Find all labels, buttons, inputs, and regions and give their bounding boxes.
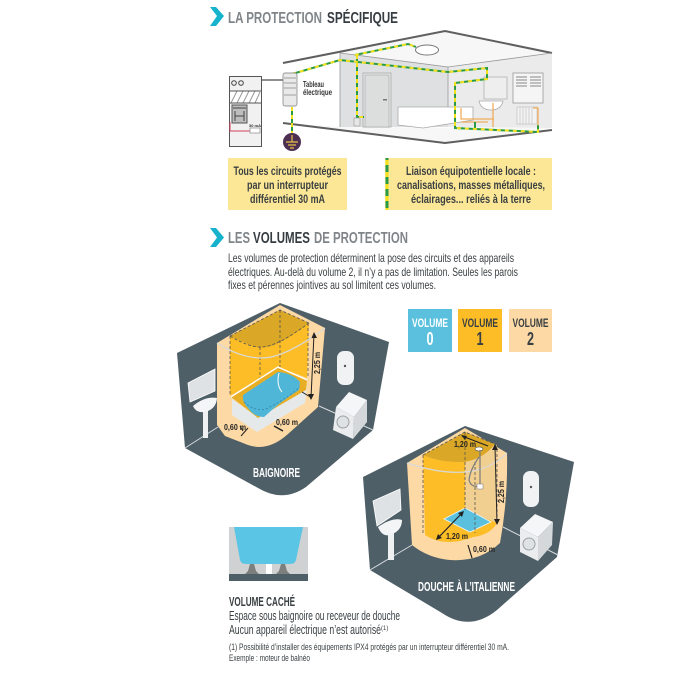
text: footnote: (1) Possibilité d’installer des équipements IPX4 protégés par un interrupteur différentiel 30 mA. bbox=[229, 642, 509, 652]
label: baignoire: BAIGNOIRE bbox=[253, 465, 300, 480]
dimension: 0,60 m bbox=[468, 545, 495, 558]
radiator bbox=[517, 107, 537, 124]
bathtub bbox=[398, 107, 473, 128]
callout: liaison équipotentielle: canalisations, masses métalliques, bbox=[397, 178, 545, 192]
volume 2 ceiling line bbox=[217, 328, 325, 358]
height dimension: 2,25 m bbox=[313, 352, 322, 374]
dimension: height 2,25 m bbox=[492, 444, 506, 525]
door bbox=[363, 73, 391, 127]
heading: les volumes de protection bbox=[228, 230, 408, 247]
icon: earth ground bbox=[283, 133, 301, 151]
text: introduction: Les volumes de protection déterminent la pose des circuits et des appareils bbox=[228, 251, 514, 265]
legend: volume 1: VOLUME bbox=[462, 316, 498, 330]
dashed outlines bbox=[423, 432, 497, 535]
width dimensions bbox=[224, 418, 298, 436]
diagram: house cutaway bbox=[283, 31, 552, 143]
cylinder ring bbox=[407, 453, 507, 472]
dimension: 0,60 m: 0,60 m bbox=[473, 545, 495, 554]
hanging dashes bbox=[230, 310, 309, 416]
volume 1 ceiling bbox=[423, 432, 495, 462]
heading: la protection spécifique bbox=[228, 8, 398, 27]
heading: la protection spécifique: LA PROTECTION bbox=[228, 10, 322, 27]
callout: circuits protégés: différentiel 30 mA bbox=[250, 192, 325, 206]
text: volume caché: VOLUME CACHÉ bbox=[229, 594, 295, 609]
diagram: switchboard detail bbox=[230, 76, 262, 146]
width dimensions: 0,60 m bbox=[224, 423, 246, 432]
icon: section chevron 2 bbox=[210, 228, 224, 247]
pipes bbox=[461, 103, 538, 127]
dimension: floor 1,20 m bbox=[436, 511, 468, 541]
washing machine bbox=[333, 392, 367, 439]
washbasin bbox=[193, 398, 217, 438]
text: introduction bbox=[228, 251, 518, 292]
floor edges bbox=[185, 406, 373, 448]
equipotential wires bbox=[292, 44, 538, 136]
heading: les volumes de protection: LES bbox=[228, 230, 250, 247]
legend: volume 2: 2 bbox=[527, 329, 534, 349]
water heater bbox=[337, 351, 354, 385]
volume 1 left wall bbox=[423, 455, 465, 535]
text: footnote: Exemple : moteur de balnéo bbox=[229, 653, 310, 663]
icon: electrical panel bbox=[283, 73, 297, 106]
floor edges bbox=[370, 527, 558, 570]
label: douche à l'italienne: DOUCHE À L’ITALIENNE bbox=[418, 579, 515, 594]
callout: circuits protégés: Tous les circuits protégés bbox=[234, 164, 342, 178]
diagram: volume caché bbox=[229, 527, 308, 581]
heading: la protection spécifique: SPÉCIFIQUE bbox=[327, 8, 398, 27]
heading: les volumes de protection: DE PROTECTION bbox=[314, 230, 408, 247]
legend: volume 0: VOLUME bbox=[412, 316, 448, 330]
dimension: top 1,20 m: 1,20 m bbox=[454, 440, 476, 449]
room shell bbox=[363, 426, 574, 622]
window bbox=[513, 73, 543, 103]
heading: les volumes de protection: VOLUMES bbox=[253, 230, 310, 247]
sink bbox=[479, 101, 503, 110]
legend: volume 1 bbox=[458, 309, 502, 352]
dimension: height 2,25 m: 2,25 m bbox=[497, 481, 506, 503]
callout: liaison équipotentielle bbox=[385, 158, 552, 210]
callout: liaison équipotentielle: Liaison équipotentielle locale : bbox=[406, 164, 536, 178]
mirror bbox=[484, 77, 507, 99]
text: footnote bbox=[229, 642, 509, 663]
washing machine bbox=[520, 514, 553, 561]
legend: volume 2 bbox=[509, 309, 552, 352]
volume 2 cylinder bbox=[407, 428, 507, 560]
callout: circuits protégés: par un interrupteur bbox=[247, 178, 328, 192]
text: volume caché: (1) bbox=[381, 626, 388, 632]
text: introduction: fixes et pérennes jointives au sol limitent ces volumes. bbox=[228, 278, 436, 292]
arrow: detail to panel bbox=[262, 76, 290, 85]
water heater bbox=[523, 471, 539, 507]
icon: section chevron 1 bbox=[210, 7, 224, 26]
diagram: baignoire room bbox=[177, 303, 389, 495]
volume 1 walls bbox=[230, 310, 309, 396]
room shell bbox=[177, 303, 389, 495]
label: tableau électrique: Tableau bbox=[303, 80, 324, 89]
legend: volume 1: 1 bbox=[476, 329, 484, 349]
bath deck bbox=[231, 368, 307, 418]
shower set bbox=[469, 447, 483, 489]
diagram: switchboard detail: 30 mA bbox=[249, 123, 261, 128]
dimension: floor 1,20 m: 1,20 m bbox=[446, 532, 468, 541]
volume 2 bbox=[217, 305, 325, 447]
text: volume caché: Aucun appareil électrique n’est autorisé bbox=[229, 623, 381, 637]
dimension: top 1,20 m bbox=[454, 435, 488, 449]
volume 1 right wall bbox=[465, 444, 497, 523]
shower tray bbox=[444, 508, 491, 532]
legend: volume 0: 0 bbox=[426, 329, 434, 349]
legend: volume 2: VOLUME bbox=[512, 316, 548, 330]
diagram: douche à l'italienne room bbox=[363, 426, 574, 622]
legend: volume 0 bbox=[408, 309, 452, 352]
ceiling light bbox=[416, 45, 438, 55]
washbasin bbox=[378, 519, 402, 560]
text: introduction: électriques. Au-delà du volume 2, il n’y a pas de limitation. Seules les parois bbox=[228, 265, 518, 279]
label: tableau électrique bbox=[303, 80, 332, 97]
bath water bbox=[243, 372, 300, 417]
volume 1 ceiling bbox=[230, 310, 309, 348]
bath sides bbox=[232, 387, 307, 432]
width dimensions: 0,60 m bbox=[276, 418, 298, 427]
volume 1 floor bbox=[425, 510, 497, 542]
height dimension bbox=[302, 332, 322, 400]
label: tableau électrique: électrique bbox=[303, 88, 332, 97]
callout: circuits protégés bbox=[228, 158, 347, 210]
text: volume caché bbox=[229, 594, 400, 637]
callout: liaison équipotentielle: éclairages... reliés à la terre bbox=[411, 192, 531, 206]
mirror bbox=[373, 489, 401, 526]
text: volume caché: Espace sous baignoire ou receveur de douche bbox=[229, 609, 400, 623]
mirror bbox=[188, 369, 215, 402]
